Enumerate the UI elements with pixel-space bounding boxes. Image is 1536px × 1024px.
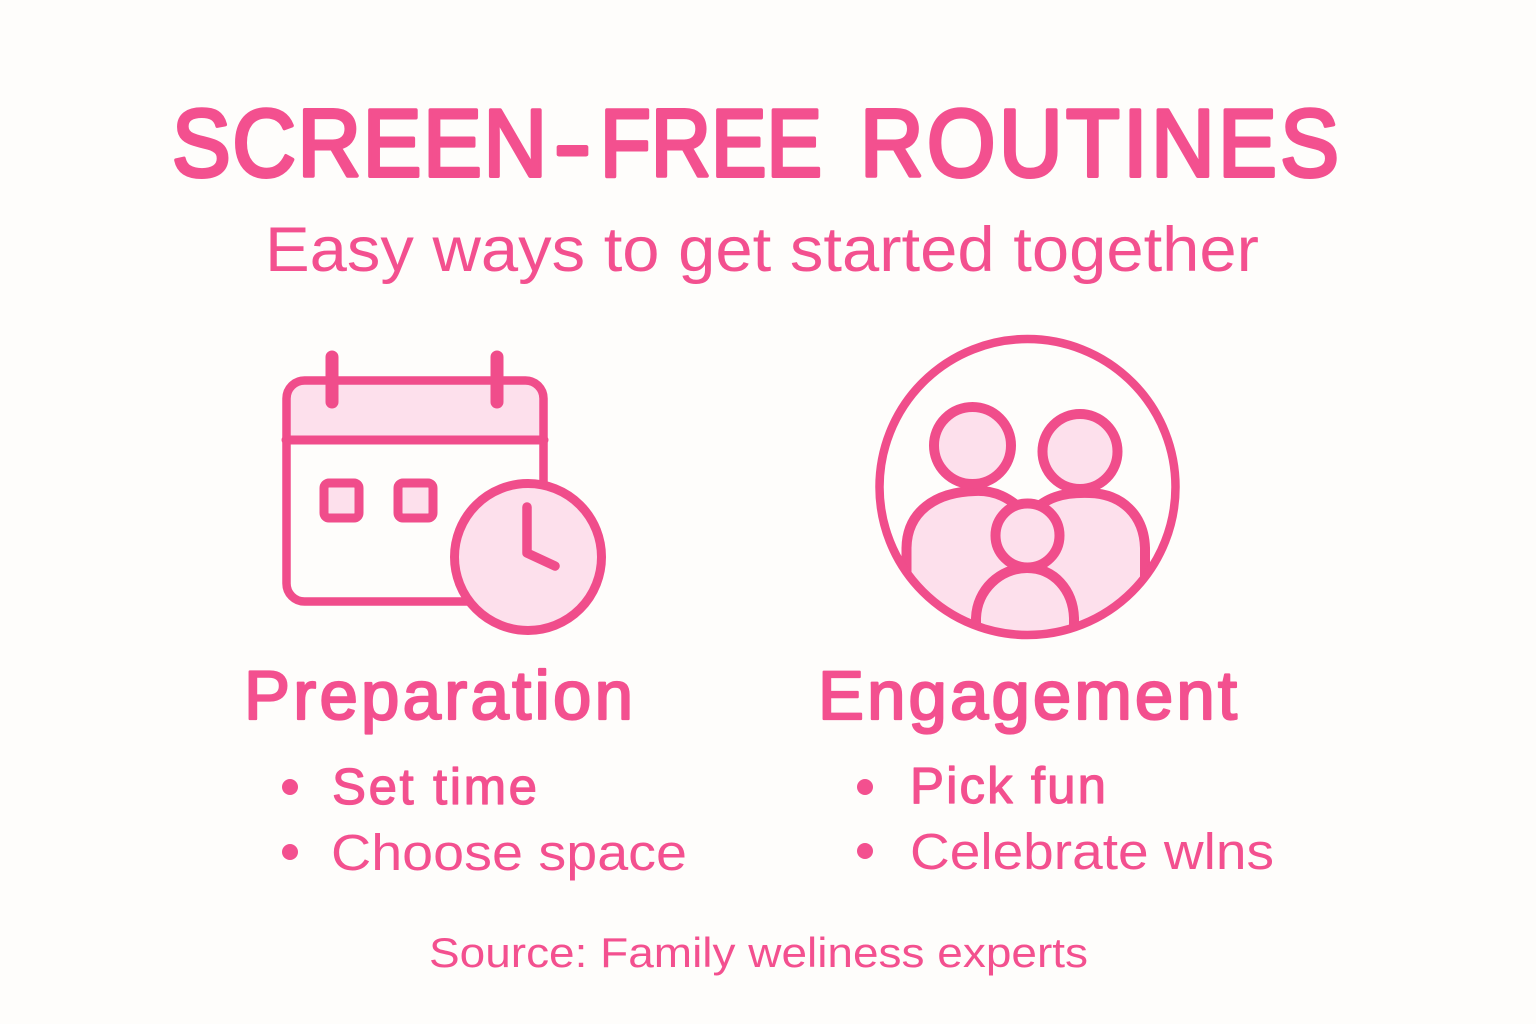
list: preparation items (282, 758, 687, 881)
icon: calendar with clock (286, 357, 602, 630)
list: engagement items (857, 757, 1274, 880)
list: preparation items: Set time (332, 758, 537, 815)
heading: preparation: Preparation (244, 657, 633, 734)
title: - (554, 90, 591, 197)
title: ROUTINES (860, 90, 1339, 197)
list: engagement items: Pick fun (910, 757, 1106, 814)
panel: preparation (244, 357, 687, 881)
title: SCREEN (172, 90, 547, 197)
title: FREE (600, 90, 822, 197)
subtitle: Easy ways to get started together (265, 215, 1259, 285)
heading: engagement: Engagement (818, 657, 1237, 734)
list: preparation items: Choose space (331, 824, 687, 881)
list: engagement items: Celebrate wlns (910, 823, 1274, 880)
source note: Source: Family weliness experts (429, 929, 1088, 976)
icon: family in circle (880, 339, 1176, 660)
panel: engagement (818, 339, 1274, 880)
